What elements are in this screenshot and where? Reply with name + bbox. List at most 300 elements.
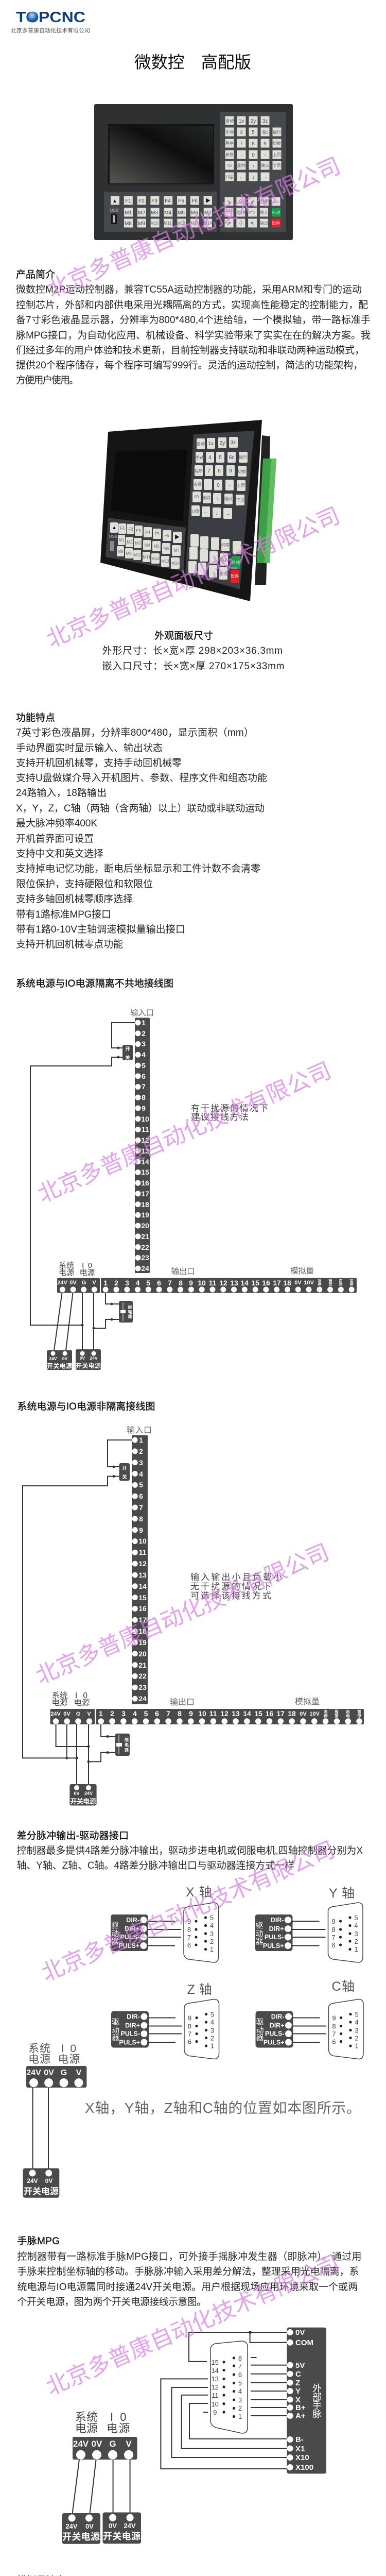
axis connector: Y: 3 xyxy=(354,1930,358,1938)
power block: 系统 xyxy=(75,2411,98,2424)
switching power supplies: 开关电源 xyxy=(76,1362,101,1369)
axis connector: Y: 8 xyxy=(331,1926,336,1934)
input terminal strip: 17 xyxy=(138,1616,147,1624)
note: 有干扰源的情况下 xyxy=(191,1104,268,1113)
angled key labels: 上页 xyxy=(237,483,245,488)
input terminal strip: 17 xyxy=(141,1190,149,1198)
axis connector: Y: 2 xyxy=(354,1938,358,1945)
product photo: angled view xyxy=(100,420,276,601)
keypad labels: 参数 xyxy=(225,152,234,157)
keypad labels: 手动 xyxy=(225,129,234,134)
power terminal block: G xyxy=(76,1711,80,1717)
power terminal block: 0V xyxy=(69,1280,77,1286)
angled key labels: M5 xyxy=(153,544,160,549)
input terminal strip: 24 xyxy=(141,1264,149,1273)
power block for axes: 24V xyxy=(27,2177,38,2184)
external handwheel block: 部 xyxy=(312,2392,322,2402)
angled key labels: M12 xyxy=(151,556,160,561)
axis connector: X: 7 xyxy=(187,1934,191,1941)
axis connector: Y: DIR- xyxy=(271,1917,284,1924)
power labels: 系统 xyxy=(51,1691,68,1700)
switching power supplies: 24V xyxy=(124,2522,136,2530)
section: product intro: 产品简介 xyxy=(16,269,55,280)
input terminal strip: 13 xyxy=(138,1571,147,1579)
section: product intro: 们经过多年的用户体验和技术更新，目前控制器支持联动和非联动两种运动模式， xyxy=(16,345,364,356)
wires xyxy=(161,2332,287,2469)
keypad labels: ⇙ xyxy=(251,199,255,205)
handwheel D-sub connector: 1 xyxy=(238,2413,242,2420)
relay: 电 xyxy=(128,1309,132,1314)
section: features: 支持开机回机械零，支持手动回机械零 xyxy=(16,757,182,769)
keypad labels: ↓ xyxy=(252,175,254,180)
output terminal strip: 动 xyxy=(346,1713,350,1718)
keypad labels: 插行 xyxy=(273,129,281,134)
output terminal strip: 16 xyxy=(266,1709,273,1718)
input terminal strip: 14 xyxy=(141,1158,149,1166)
angled key labels: 5 xyxy=(219,455,222,461)
angled key labels: M6 xyxy=(163,546,169,551)
angled key labels: 插行 xyxy=(239,454,247,460)
keypad labels: 7 xyxy=(240,141,243,147)
section: features: 支持掉电记忆功能，断电后坐标显示和工件计数不会清零 xyxy=(16,863,260,874)
external handwheel block: 手 xyxy=(312,2400,322,2411)
watermark overlays: 北京多普康自动化技术有限公司 xyxy=(43,503,344,653)
handwheel D-sub connector: 2 xyxy=(238,2404,242,2412)
keypad labels: 程序 xyxy=(225,141,234,146)
output terminal strip: 5 xyxy=(144,1709,148,1718)
relay: 继 xyxy=(125,1737,129,1742)
input terminal strip: 19 xyxy=(138,1638,147,1647)
switching power supplies: 24V xyxy=(49,1356,57,1361)
power block for axes: 0V xyxy=(44,2069,54,2077)
section: features: 7英寸彩色液晶屏，分辨率800*480，显示面积（mm） xyxy=(16,727,254,738)
keypad labels: 6c xyxy=(262,130,268,135)
input terminal strip: 4 xyxy=(142,1050,146,1059)
input terminal strip: 9 xyxy=(142,1104,146,1112)
switching power supplies: 0V xyxy=(85,2522,94,2530)
MPG wiring diagram xyxy=(62,2328,326,2544)
axis connector: Y: 1 xyxy=(354,1945,358,1953)
switch: 关 xyxy=(122,1474,127,1480)
power block: 电源 xyxy=(107,2422,130,2435)
handwheel D-sub connector: 6 xyxy=(238,2371,242,2379)
output terminal strip: 11 xyxy=(209,1279,217,1287)
output terminal strip: 11 xyxy=(209,1709,217,1718)
axis titles: X轴 xyxy=(186,1885,212,1900)
axis connector: C xyxy=(255,1999,363,2059)
keypad labels: F6 xyxy=(191,198,198,204)
heading: non-isolated wiring: 系统电源与IO电源非隔离接线图 xyxy=(17,1401,155,1412)
angled key labels: → xyxy=(225,511,231,517)
power terminal block: 0V xyxy=(63,1711,71,1717)
keypad labels: M8 xyxy=(125,221,132,227)
axis connector: C: 9 xyxy=(332,2014,336,2022)
keypad labels: M3 xyxy=(151,210,158,216)
power labels: 系统 xyxy=(59,1261,74,1270)
angled key labels: M13 xyxy=(161,559,169,564)
axis connector: X: PULS- xyxy=(120,1934,139,1941)
power labels: I 0 xyxy=(82,1261,92,1270)
axis connector: C: 2 xyxy=(355,2034,359,2042)
relay xyxy=(119,1301,133,1323)
output terminal strip: 暂 xyxy=(357,1709,361,1714)
power labels: 电源 xyxy=(74,1698,90,1707)
axis titles: Y轴 xyxy=(329,1886,355,1901)
heading: isolated wiring: 系统电源与IO电源隔离不共地接线图 xyxy=(16,978,173,989)
section: features: 支持开机回机械零点功能 xyxy=(16,939,123,950)
axis connector: Z: PULS+ xyxy=(119,2039,140,2046)
axis connector: Z: 器 xyxy=(112,2034,119,2042)
input terminal strip: 2 xyxy=(142,1029,146,1038)
input terminal strip: 12 xyxy=(138,1560,147,1568)
input terminal strip: 18 xyxy=(138,1627,147,1635)
power block for axes: 开关电源 xyxy=(24,2187,59,2196)
angled key labels: 4 xyxy=(208,455,212,461)
external handwheel block: X xyxy=(295,2396,301,2404)
axis connector: X: 2 xyxy=(210,1938,214,1945)
logo: TOPCNC: TOPCNC xyxy=(16,9,85,26)
input terminal strip: 14 xyxy=(138,1582,147,1590)
external handwheel block: B- xyxy=(295,2435,304,2444)
input terminal strip: 18 xyxy=(141,1200,149,1209)
relay xyxy=(115,1734,130,1756)
axis connector: Z: PULS- xyxy=(120,2030,140,2037)
wiring diagram 2 xyxy=(23,1426,364,1805)
output terminal strip: 停 xyxy=(357,1713,361,1718)
external handwheel block: COM xyxy=(295,2338,313,2347)
section: MPG handwheel: 控制器带有一路标准手脉MPG接口，可外接手摇脉冲发生器（即脉冲）。通过用 xyxy=(17,2251,361,2262)
output terminal strip: 17 xyxy=(276,1709,285,1718)
panel size text: 嵌入口尺寸：长×宽×厚 270×175×33mm xyxy=(102,660,284,672)
axis connector: Z: 4 xyxy=(210,2019,214,2026)
keypad labels: F1 xyxy=(125,198,131,204)
angled key labels: F1 xyxy=(120,526,125,531)
switching power supplies: 0V xyxy=(109,2522,117,2530)
handwheel D-sub connector: 7 xyxy=(238,2362,242,2370)
output terminal strip: 7 xyxy=(166,1709,170,1718)
watermark overlays: 北京多普康自动化技术有限公司 xyxy=(34,1058,335,1208)
angled key labels: M7 xyxy=(173,548,180,553)
section: features: 手动界面实时显示输入、输出状态 xyxy=(16,742,163,754)
keypad labels: ⇘ xyxy=(227,199,231,205)
input terminal strip: 11 xyxy=(139,1548,147,1556)
power terminal block: 24V xyxy=(57,1280,67,1286)
axis connector: C: 7 xyxy=(332,2030,336,2038)
keypad labels: M7 xyxy=(204,210,212,216)
keypad labels: USB xyxy=(110,208,118,213)
axis connector: Y: PULS+ xyxy=(263,1942,284,1950)
power labels: I 0 xyxy=(75,1691,87,1700)
input terminal strip: 9 xyxy=(139,1526,143,1534)
logo: TOPCNC: 北京多普康自动化技术有限公司 xyxy=(11,27,90,34)
axis connector: X: 4 xyxy=(210,1922,214,1929)
section: MPG handwheel: 手脉MPG xyxy=(17,2235,60,2247)
keypad labels: 输出 xyxy=(260,221,268,226)
input terminal strip: 7 xyxy=(142,1082,146,1091)
section: MPG handwheel: 统电源与IO电源需同时接通24V开关电源。用户根据现场应用环境采取一个或两 xyxy=(17,2281,358,2293)
switching power supplies xyxy=(47,1349,101,1370)
input terminal strip: 15 xyxy=(141,1168,149,1176)
handwheel D-sub connector: 12 xyxy=(211,2383,219,2391)
panel size text: 外形尺寸：长×宽×厚 298×203×36.3mm xyxy=(102,645,283,656)
angled key labels: 启动 xyxy=(232,560,240,565)
power block: G xyxy=(109,2439,116,2449)
switching power supply: 开关电源 xyxy=(70,1798,96,1805)
angled key labels: 1x xyxy=(208,441,214,447)
output terminal strip: 9 xyxy=(189,1279,193,1287)
output terminal strip: 0V xyxy=(294,1280,302,1286)
section: product intro: 微数控M2P运动控制器，兼容TC55A运动控制器的功能，采用ARM和专门的运动 xyxy=(16,284,362,295)
switching power supplies: 开关电源 xyxy=(103,2531,141,2541)
input terminal strip: 20 xyxy=(138,1650,147,1658)
output terminal strip: 8 xyxy=(178,1709,182,1718)
relay: 器 xyxy=(125,1748,129,1753)
switching power supplies: 0V xyxy=(80,1355,85,1361)
input terminal strip: 8 xyxy=(142,1093,146,1101)
power block for axes: I 0 xyxy=(61,2043,76,2055)
angled key labels: M9 xyxy=(126,551,132,556)
axis connector: C: 动 xyxy=(256,2026,264,2035)
output terminal strip: 9 xyxy=(189,1709,193,1718)
input terminal strip: 3 xyxy=(142,1040,146,1048)
external handwheel block: 0V xyxy=(295,2328,305,2337)
angled key labels xyxy=(109,440,247,579)
output terminal strip: 3 xyxy=(121,1709,126,1718)
switching power supply: 24V xyxy=(84,1791,93,1796)
angled key labels: M4 xyxy=(144,543,150,548)
input terminal strip: 23 xyxy=(141,1253,149,1262)
keypad labels: M4 xyxy=(164,210,171,216)
external handwheel block: Y xyxy=(295,2387,301,2396)
keypad labels: ↑ xyxy=(252,163,254,169)
keypad labels: ← xyxy=(239,175,244,180)
axis connector: X: DIR+ xyxy=(125,1925,139,1933)
axis connector: C: DIR+ xyxy=(270,2022,284,2029)
switching power supplies: 开关电源 xyxy=(47,1362,72,1369)
keypad labels: F4 xyxy=(165,198,171,204)
power block for axes xyxy=(23,2043,86,2198)
keypad labels: ⇨ xyxy=(250,210,255,216)
axis connector: C: 1 xyxy=(355,2042,359,2049)
power labels xyxy=(59,1261,95,1277)
output terminal strip: 8 xyxy=(179,1279,183,1287)
input terminal strip: 5 xyxy=(139,1481,143,1489)
switching power supplies xyxy=(62,2512,141,2544)
handwheel D-sub connector: 8 xyxy=(238,2354,242,2362)
keypad labels: M14 xyxy=(204,221,212,226)
angled key labels: 手动 xyxy=(196,455,204,460)
keypad labels: 5 xyxy=(252,130,255,135)
angled key labels: 输出 xyxy=(219,571,227,576)
section: features: 限位保护，支持硬限位和软限位 xyxy=(16,878,153,890)
input terminal strip: 4 xyxy=(139,1470,143,1478)
power labels xyxy=(51,1691,90,1707)
angled key labels: F3 xyxy=(136,529,141,533)
output terminal strip: 2 xyxy=(110,1709,114,1718)
output terminal strip: 警 xyxy=(335,1713,339,1718)
keypad labels: ⇩ xyxy=(238,221,243,227)
angled key labels: 2y xyxy=(220,440,225,446)
keypad labels: M12 xyxy=(177,221,185,226)
keypad labels: F3 xyxy=(151,198,157,204)
keypad labels: 上页 xyxy=(273,152,281,157)
input terminal strip: 24 xyxy=(138,1694,147,1703)
angled key labels: 0 xyxy=(217,483,220,488)
output terminal strip: 14 xyxy=(243,1709,251,1718)
axis connector: C: 3 xyxy=(355,2027,359,2034)
output terminal strip: 停 xyxy=(350,1282,353,1286)
keypad labels: 自动 xyxy=(225,118,234,123)
axis connector: Y xyxy=(255,1903,363,1962)
power block for axes: 电源 xyxy=(58,2054,80,2065)
output terminal strip: 6 xyxy=(157,1279,161,1287)
keypad labels: 点动 xyxy=(237,210,245,215)
panel size text: 外观面板尺寸 xyxy=(154,630,213,641)
power terminal block: G xyxy=(82,1280,86,1286)
section: features: 支持多轴回机械零顺序选择 xyxy=(16,893,133,905)
output terminal strip xyxy=(96,1709,364,1724)
power block: 24V xyxy=(73,2439,89,2449)
external handwheel block: 脉 xyxy=(312,2409,322,2419)
keypad labels: 切换 xyxy=(273,141,281,146)
input terminal strip: 8 xyxy=(139,1515,143,1523)
note: 建议接线方法 xyxy=(191,1112,249,1122)
switching power supply xyxy=(69,1784,97,1805)
watermark overlays: 北京多普康自动化技术有限公司 xyxy=(42,2250,343,2400)
section: differential pulse: 轴、Y轴、Z轴、C轴。4路差分脉冲输出口与驱动器连接方式一样 xyxy=(16,1860,294,1871)
power block for axes: 0V xyxy=(45,2177,52,2184)
note xyxy=(191,1104,268,1122)
power terminal block xyxy=(57,1278,100,1293)
power block: 电源 xyxy=(75,2422,98,2435)
angled key labels: M1 xyxy=(118,538,125,543)
keypad labels: IO xyxy=(227,163,232,168)
angled key labels: ▶ xyxy=(174,534,180,540)
angled keypad keys xyxy=(110,437,248,580)
wiring diagram 1: 输出口 xyxy=(171,1267,195,1276)
handwheel D-sub connector: 14 xyxy=(211,2367,219,2375)
axis connector: Y: 器 xyxy=(255,1937,264,1946)
wiring diagram 2: 模拟量 xyxy=(295,1697,320,1706)
angled key labels: 输入 xyxy=(220,557,228,562)
handwheel D-sub connector: 4 xyxy=(238,2387,242,2395)
section: MPG handwheel: 个开关电源，图为两个开关电源接线示意图。 xyxy=(17,2296,206,2308)
axis connector: Z: 8 xyxy=(188,2023,191,2030)
power labels: 电源 xyxy=(79,1268,95,1277)
power block for axes: V xyxy=(76,2069,82,2077)
keypad labels: ⇦ xyxy=(226,210,232,216)
axis titles xyxy=(186,1885,355,1997)
section: features xyxy=(16,712,267,950)
angled key labels: F5 xyxy=(154,532,160,536)
angled key labels: · xyxy=(207,482,209,488)
output terminal strip: 10V xyxy=(304,1280,314,1286)
input terminal strip: 5 xyxy=(142,1061,146,1070)
handwheel D-sub connector: 10 xyxy=(211,2400,219,2408)
switch xyxy=(119,1463,130,1481)
keypad labels: · xyxy=(240,152,242,158)
output terminal strip: 停 xyxy=(318,1282,321,1286)
output terminal strip: 13 xyxy=(232,1709,240,1718)
input terminal strip: 6 xyxy=(142,1072,146,1080)
keypad labels: U盘 xyxy=(226,174,233,179)
section: MPG handwheel: 手脉来控制坐标轴的移动。手脉脉冲输入采用差分解法，整理采用光电隔离，系 xyxy=(17,2266,359,2277)
output terminal strip: 6 xyxy=(155,1709,159,1718)
watermark overlays: 北京多普康自动化技术有限公司 xyxy=(43,153,344,303)
handwheel D-sub connector: 5 xyxy=(238,2379,242,2387)
axis connector: X: 9 xyxy=(187,1918,191,1925)
section: features: 支持U盘做媒介导入开机图片、参数、程序文件和组态功能 xyxy=(16,772,267,784)
input terminal strip xyxy=(132,1435,148,1704)
output terminal strip: 4 xyxy=(136,1279,140,1287)
handwheel D-sub connector: 9 xyxy=(213,2409,217,2416)
switching power supplies: 开关电源 xyxy=(62,2532,100,2542)
title: 微数控 高配版 xyxy=(134,53,251,72)
input terminal strip: 7 xyxy=(139,1503,143,1512)
angled key labels: 暂停 xyxy=(231,573,239,579)
keypad labels xyxy=(110,118,281,227)
angled key labels: F2 xyxy=(128,527,133,532)
angled key labels: ↓ xyxy=(215,511,218,516)
output terminal strip: 急 xyxy=(318,1278,321,1283)
keypad labels: 暂停 xyxy=(272,221,280,226)
keypad labels: ⇗ xyxy=(227,221,231,227)
angled key labels: M8 xyxy=(117,549,124,554)
angled key labels: 自动 xyxy=(197,441,205,446)
axis titles: C轴 xyxy=(331,1979,355,1994)
section: features: 最大脉冲频率400K xyxy=(16,818,97,829)
axis connector: Z: 9 xyxy=(188,2014,191,2022)
section: differential pulse: 差分脉冲输出-驱动器接口 xyxy=(16,1830,129,1841)
keypad labels: M5 xyxy=(178,210,185,216)
output terminal strip: 18 xyxy=(288,1709,296,1718)
output terminal strip: 0V xyxy=(300,1711,307,1717)
switch: 开 xyxy=(125,1046,130,1052)
power labels: 电源 xyxy=(51,1698,68,1707)
handwheel D-sub connector: 3 xyxy=(238,2396,242,2404)
axis connector: Z: 6 xyxy=(188,2038,191,2045)
external handwheel block: X100 xyxy=(295,2463,313,2472)
keypad labels: F5 xyxy=(178,198,184,204)
external handwheel block: X10 xyxy=(295,2453,309,2462)
external handwheel block: Z xyxy=(295,2379,300,2387)
wiring diagram 2: 输出口 xyxy=(170,1698,195,1707)
axis connector: X: 驱 xyxy=(111,1921,119,1930)
axis connector: Y: 驱 xyxy=(255,1921,264,1930)
input terminal strip xyxy=(135,1018,150,1273)
axis connector: Y: 9 xyxy=(331,1918,336,1925)
output terminal strip: 暂 xyxy=(350,1278,353,1283)
input terminal strip: 2 xyxy=(139,1447,143,1455)
angled key labels: USB xyxy=(109,534,117,539)
axis connector: C: 8 xyxy=(332,2023,336,2030)
section: MPG handwheel xyxy=(17,2235,361,2308)
external handwheel block xyxy=(287,2328,326,2473)
section: features: 功能特点 xyxy=(16,712,55,723)
angled key labels: 程序 xyxy=(195,468,203,473)
output terminal strip: 报 xyxy=(328,1278,332,1283)
output terminal strip: 警 xyxy=(328,1282,332,1286)
keypad labels: 确认 xyxy=(261,163,269,168)
power terminal block xyxy=(50,1709,95,1724)
keypad labels: 删除 xyxy=(237,163,245,168)
angled key labels: 3z xyxy=(231,440,236,446)
axis connector: C: PULS- xyxy=(265,2030,284,2037)
keypad labels: ▲ xyxy=(112,198,117,204)
axis connector: C: 器 xyxy=(256,2034,264,2042)
section: features: 开机首界面可设置 xyxy=(16,833,94,844)
wires xyxy=(30,1023,135,1350)
